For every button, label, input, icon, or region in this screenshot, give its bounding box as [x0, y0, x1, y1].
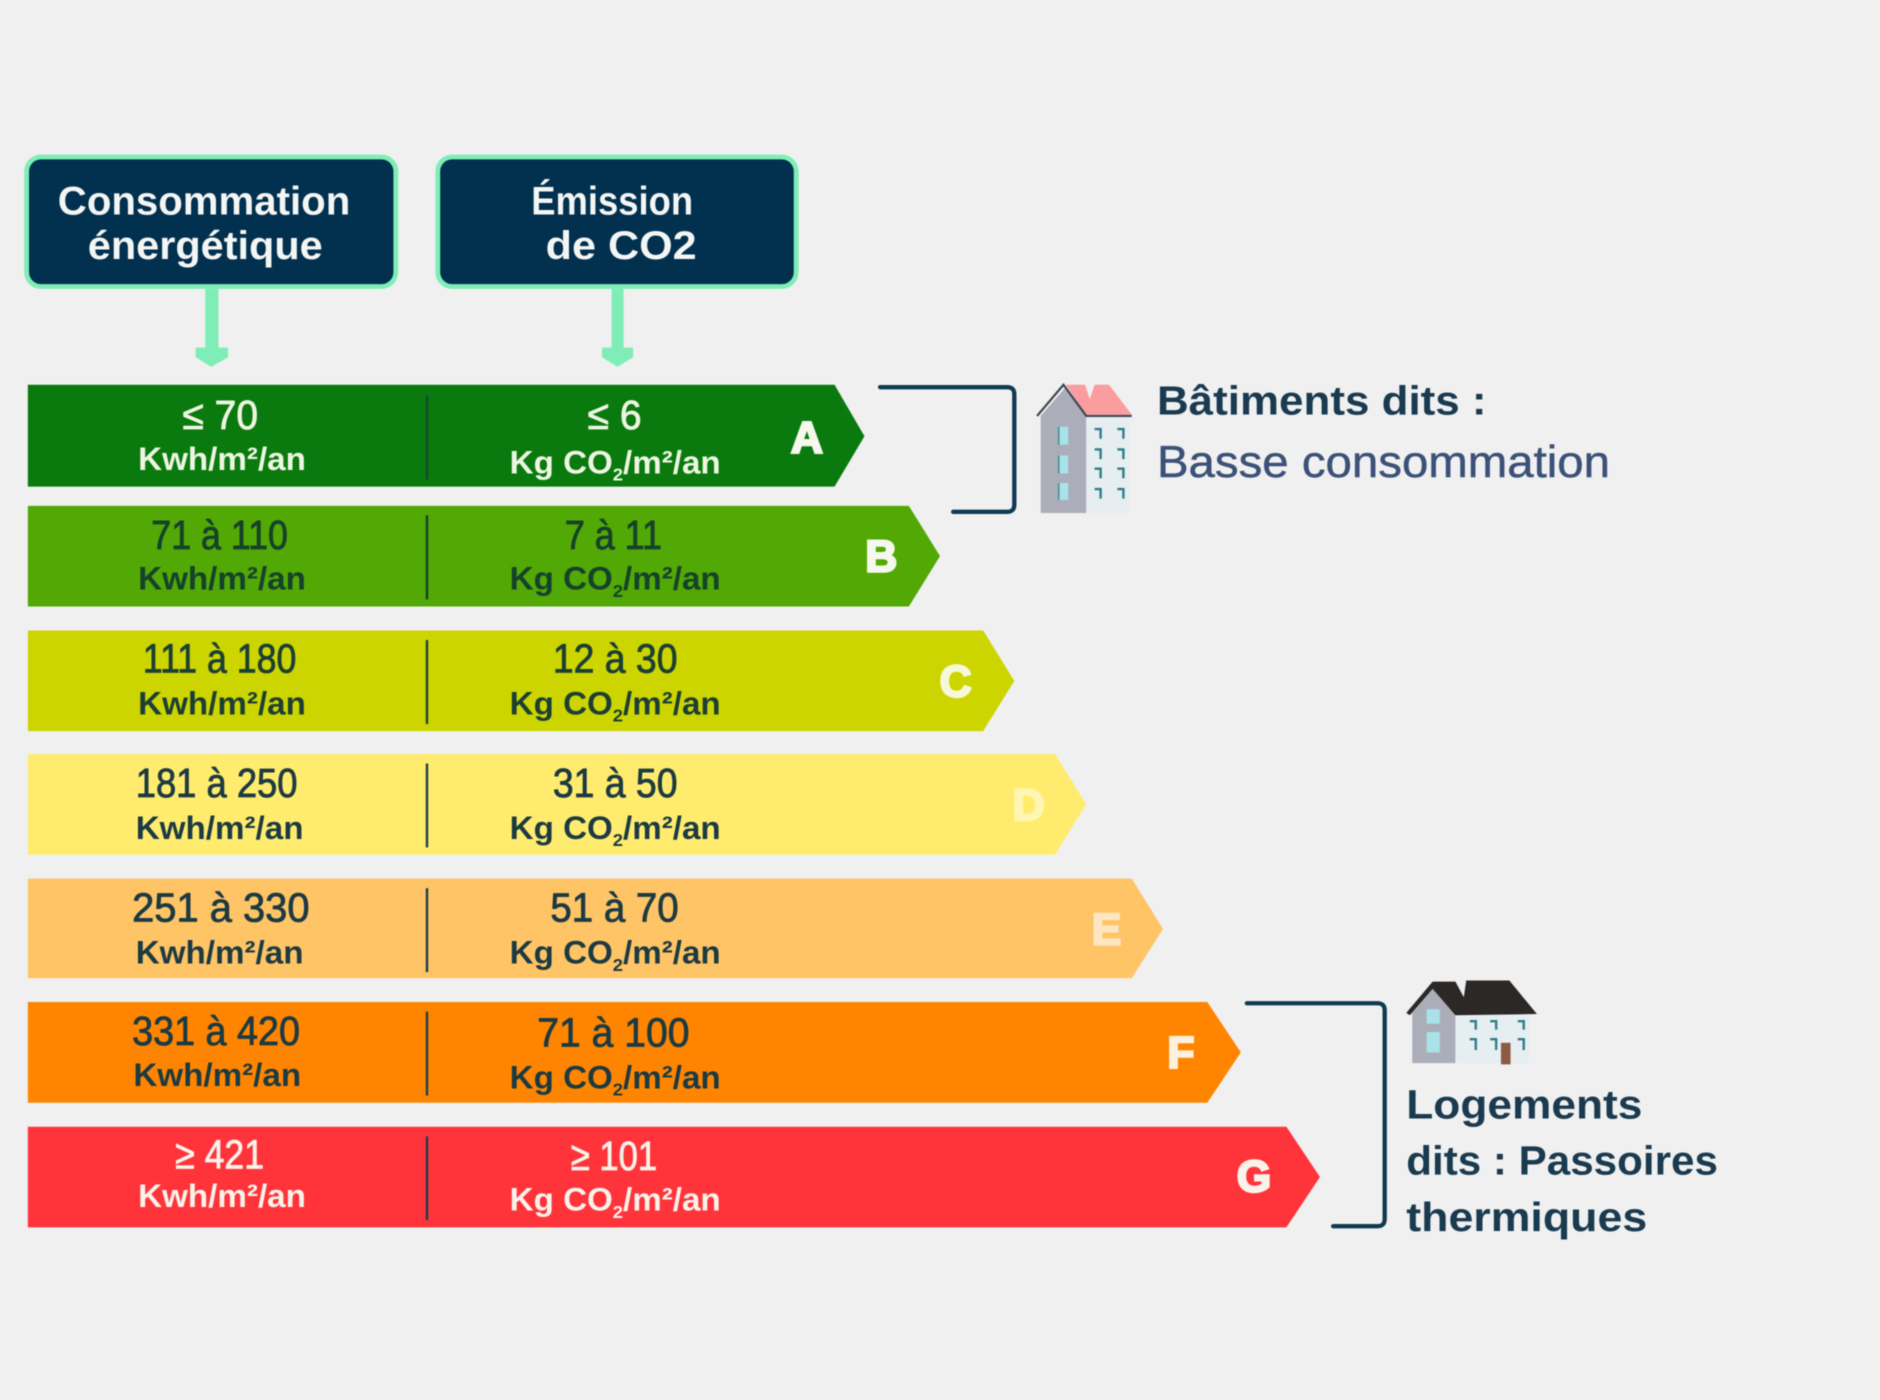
header: Émission de CO2 [438, 157, 796, 286]
bar E: 51 à 70 [550, 885, 679, 931]
bar C: /m²/an [623, 685, 721, 721]
bar A: /m²/an [623, 444, 721, 480]
bar G: G [1237, 1152, 1271, 1201]
bar G: Kwh/m²/an [138, 1178, 306, 1214]
header: Consommation énergétique [27, 157, 396, 286]
bar A: A [791, 414, 823, 463]
label: Logements dits Passoires thermiques: thermiques [1406, 1194, 1647, 1240]
bar C: 111 à 180 [143, 635, 296, 681]
bar C: 12 à 30 [553, 635, 677, 681]
header: Émission de CO2: Émission [531, 180, 693, 224]
bar F [28, 1002, 1241, 1103]
bracket: A-B [880, 387, 1014, 512]
bar B: 7 à 11 [565, 512, 662, 558]
bar F: 71 à 100 [537, 1009, 689, 1055]
bar G: ≥ 101 [571, 1133, 657, 1179]
bar C: C [940, 657, 972, 706]
bar E [28, 879, 1163, 978]
bar D: D [1013, 781, 1045, 830]
bar E: Kwh/m²/an [136, 935, 304, 971]
bar A: ≤ 6 [588, 392, 642, 438]
bar B: Kwh/m²/an [138, 561, 306, 597]
bar D: 181 à 250 [136, 760, 298, 806]
bar E: /m²/an [623, 935, 721, 971]
icon: apartment building [1037, 385, 1132, 513]
bar G: ≥ 421 [175, 1132, 264, 1178]
bar G [28, 1127, 1320, 1227]
bar D [28, 754, 1086, 855]
label: Bâtiments dits: Bâtiments dits : [1157, 378, 1487, 424]
arrow: consommation [196, 289, 228, 367]
bracket: F-G [1247, 1003, 1385, 1226]
label: Logements dits Passoires thermiques: Logements [1406, 1081, 1642, 1127]
header: Consommation énergétique: Consommation [58, 180, 350, 224]
bar C: Kg CO [510, 685, 610, 721]
bar E: E [1092, 906, 1121, 955]
icon: house [1406, 980, 1537, 1064]
bar E: Kg CO [510, 935, 610, 971]
bar F: Kg CO [510, 1059, 610, 1095]
bar D: 2 [613, 830, 623, 850]
label: Bâtiments dits: Basse consommation [1157, 438, 1610, 487]
bar A: 2 [613, 465, 623, 485]
bar D: Kg CO [510, 810, 610, 846]
arrow: émission [602, 289, 633, 367]
label: Bâtiments dits [1157, 378, 1610, 487]
bar A: Kwh/m²/an [138, 441, 306, 477]
bar F: /m²/an [623, 1059, 721, 1095]
bar D: /m²/an [623, 810, 721, 846]
bar F: F [1167, 1029, 1194, 1078]
bar B: B [865, 533, 897, 582]
bar B [28, 506, 940, 607]
bar A: Kg CO [510, 444, 610, 480]
bar D: 31 à 50 [553, 760, 677, 806]
bar D: Kwh/m²/an [136, 810, 304, 846]
bar F: Kwh/m²/an [133, 1057, 301, 1093]
bar C [28, 630, 1014, 731]
bar A: ≤ 70 [182, 392, 258, 438]
bar G: Kg CO [510, 1182, 610, 1218]
label: Logements dits Passoires thermiques [1406, 1081, 1718, 1240]
bar G: /m²/an [623, 1182, 721, 1218]
bar C: Kwh/m²/an [138, 685, 306, 721]
header: Consommation énergétique: énergétique [88, 224, 323, 268]
label: Logements dits Passoires thermiques: dits : Passoires [1406, 1138, 1718, 1184]
bar E: 251 à 330 [132, 885, 310, 931]
bar B: /m²/an [623, 561, 721, 597]
bar C: 2 [613, 706, 623, 726]
bar G: 2 [613, 1202, 623, 1222]
bar A [28, 385, 864, 487]
bar B: 71 à 110 [151, 512, 288, 558]
bar F: 2 [613, 1080, 623, 1100]
bar F: 331 à 420 [132, 1008, 300, 1054]
header: Émission de CO2: de CO2 [546, 224, 697, 268]
bar B: Kg CO [510, 561, 610, 597]
bar E: 2 [613, 955, 623, 975]
bar B: 2 [613, 581, 623, 601]
